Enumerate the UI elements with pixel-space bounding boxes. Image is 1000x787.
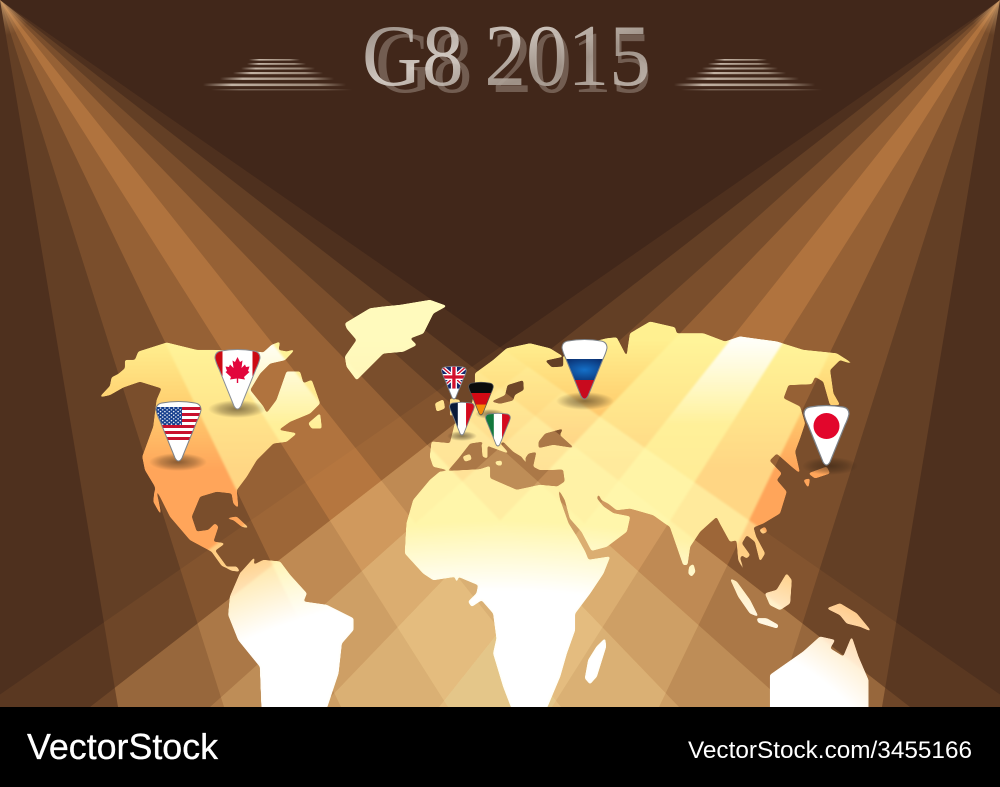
pin: Germany flag bbox=[468, 382, 494, 417]
footer bar bbox=[0, 707, 1000, 787]
world map bbox=[101, 300, 870, 707]
title: G8 2015: G8 2015 bbox=[362, 7, 651, 105]
pin: Russia flag bbox=[561, 339, 608, 402]
decorative steps right of title bbox=[674, 59, 822, 90]
pin: France flag bbox=[449, 402, 475, 437]
footer image id: VectorStock.com/3455166 bbox=[688, 737, 972, 764]
pin shadows bbox=[149, 392, 858, 475]
pin: UK flag bbox=[441, 366, 467, 401]
pin: Canada flag bbox=[214, 349, 261, 412]
pin: Italy flag bbox=[485, 413, 511, 448]
footer logo: VectorStock: VectorStock bbox=[27, 726, 219, 767]
title: G8 2015: G8 2015 bbox=[375, 14, 651, 112]
decorative steps left of title bbox=[203, 59, 352, 90]
pin: USA flag bbox=[155, 401, 202, 464]
pin: Japan flag bbox=[803, 405, 850, 468]
beam crossings bbox=[115, 393, 885, 707]
